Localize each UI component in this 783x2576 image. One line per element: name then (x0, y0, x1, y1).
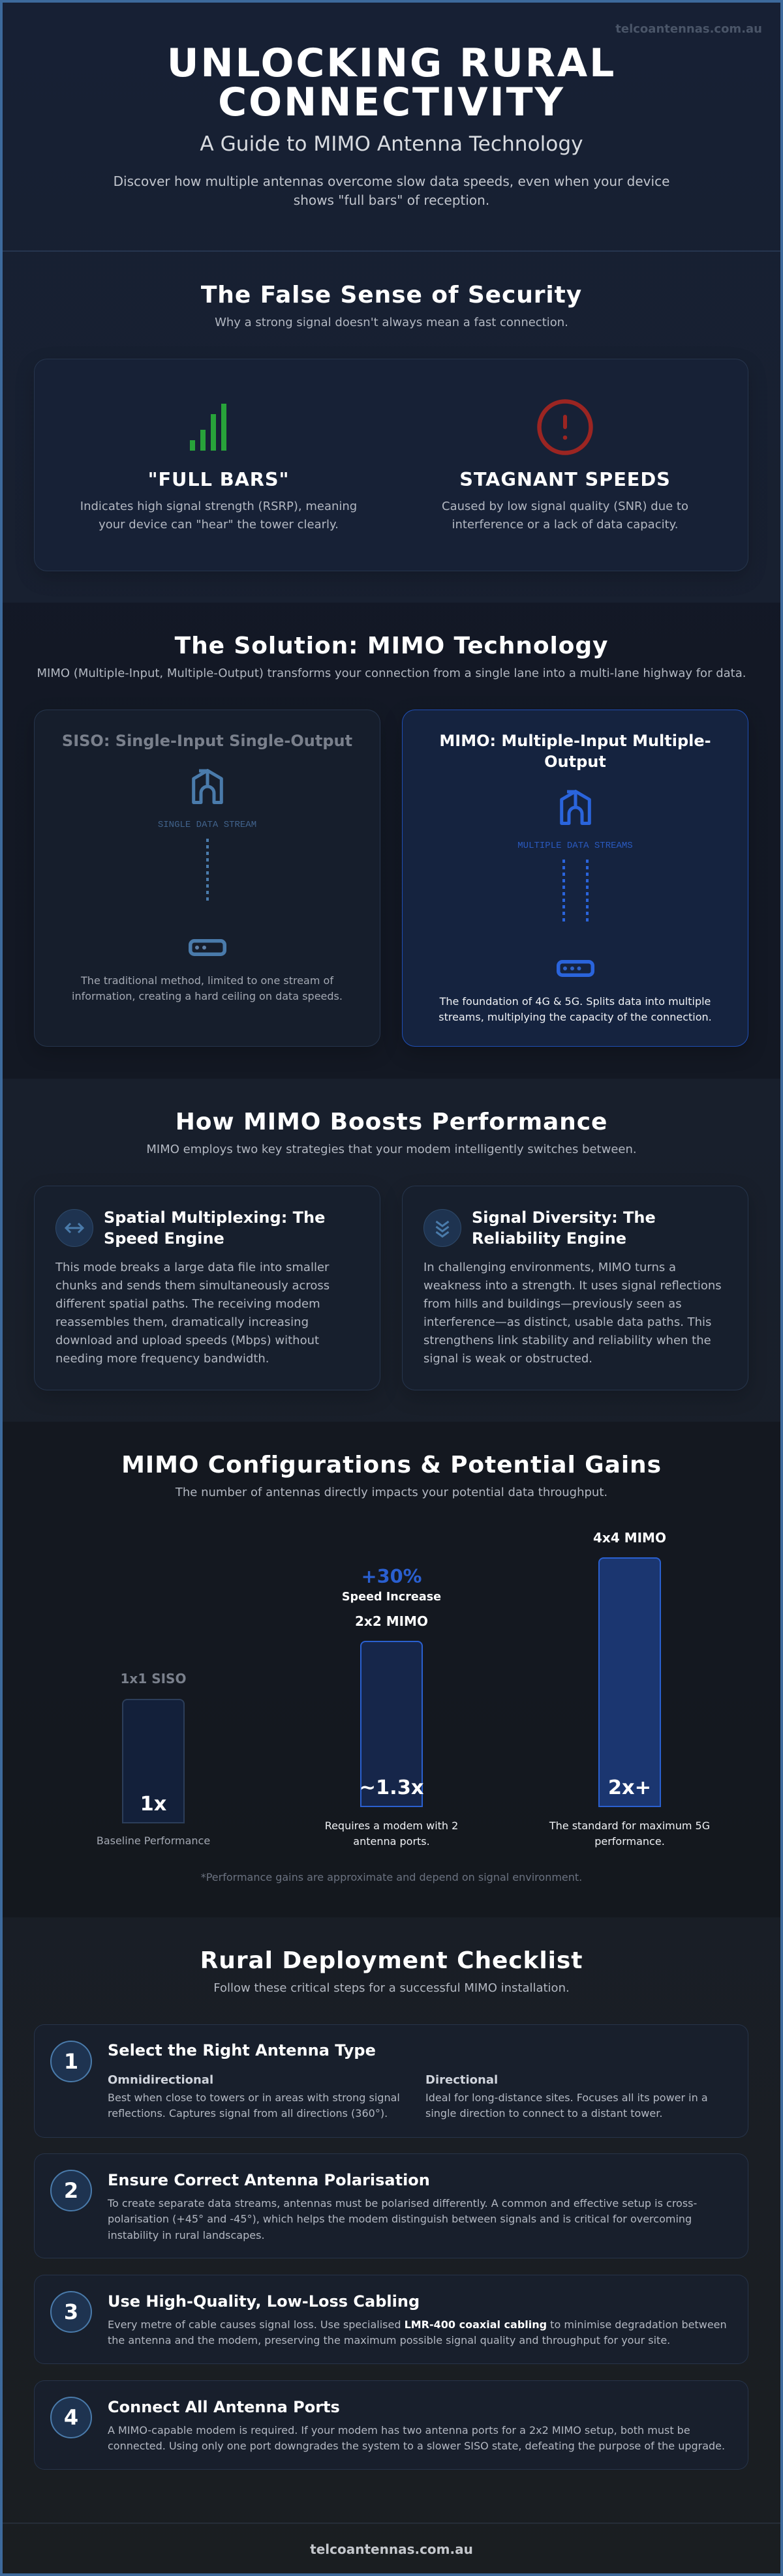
caption (325, 1820, 458, 1848)
value: 1x (140, 1792, 166, 1816)
card text (423, 1261, 722, 1366)
step text: To create separate data streams, antennas must be polarised differently. A common and effective setup is cross- (108, 2197, 697, 2209)
panel: SISO (34, 710, 380, 1047)
card text: needing more frequency bandwidth. (55, 1352, 269, 1366)
column: 2x2 MIMO (325, 1565, 458, 1848)
step text: polarisation (+45° and -45°), which helps the modem distinguish between signals and is critical for overcoming (108, 2213, 692, 2225)
section: false sense of security (34, 282, 748, 571)
title: CONNECTIVITY (218, 80, 565, 125)
icon: antenna (192, 769, 223, 804)
section subtitle: MIMO (Multiple-Input, Multiple-Output) transforms your connection from a single lane into a multi-lane highway for data. (37, 666, 746, 680)
step number: 1 (64, 2049, 78, 2074)
step text: the antenna and the modem, preserving the maximum possible signal quality and throughput for your site. (108, 2334, 670, 2346)
callout label: Speed Increase (342, 1591, 441, 1604)
intro text: shows "full bars" of reception. (294, 192, 489, 208)
directional text: Ideal for long-distance sites. Focuses all its power in a (425, 2091, 708, 2104)
section: configurations and gains (0, 1422, 783, 1917)
step text (108, 2318, 727, 2346)
card text: In challenging environments, MIMO turns a (423, 1261, 676, 1274)
omnidirectional text (108, 2091, 400, 2119)
intro text: Discover how multiple antennas overcome slow data speeds, even when your device (114, 173, 669, 189)
caption: The standard for maximum 5G (549, 1820, 710, 1831)
MIMO title (439, 732, 711, 771)
panel: signal diversity (402, 1186, 748, 1390)
card text: interference—as distinct, usable data paths. This (423, 1315, 711, 1329)
title: UNLOCKING RURAL (167, 40, 616, 86)
footer (0, 2523, 783, 2576)
SISO text (72, 974, 343, 1002)
card text: from hills and buildings—previously seen as (423, 1297, 682, 1311)
section subtitle: MIMO employs two key strategies that your modem intelligently switches between. (146, 1143, 637, 1156)
data stream 2 (586, 860, 589, 921)
directional text (425, 2091, 708, 2119)
card text: weakness into a strength. It uses signal reflections (423, 1279, 722, 1293)
step number: 4 (64, 2405, 78, 2430)
card heading (104, 1208, 325, 1248)
SISO text: information, creating a hard ceiling on data speeds. (72, 990, 343, 1002)
stagnant speeds text: Caused by low signal quality (SNR) due to (442, 500, 688, 513)
step text: instability in rural landscapes. (108, 2229, 265, 2241)
step number (50, 2291, 92, 2333)
heading: Rural Deployment Checklist (200, 1947, 583, 1974)
label: 2x2 MIMO (355, 1613, 428, 1629)
step title: Ensure Correct Antenna Polarisation (108, 2171, 430, 2189)
label: 1x1 SISO (121, 1671, 186, 1686)
step title: Connect All Antenna Ports (108, 2398, 340, 2416)
MIMO title: MIMO: Multiple-Input Multiple- (439, 732, 711, 750)
card text (55, 1261, 330, 1366)
panel: step 2 (34, 2153, 748, 2258)
bar chart (97, 1530, 710, 1848)
step text (107, 2197, 697, 2241)
stream label: MULTIPLE DATA STREAMS (517, 841, 633, 851)
section: the solution (0, 603, 783, 1079)
caption: Baseline Performance (97, 1835, 210, 1847)
step number (50, 2170, 92, 2211)
bar (598, 1557, 661, 1807)
full bars text: your device can "hear" the tower clearly. (99, 518, 339, 531)
directional text: single direction to connect to a distant tower. (425, 2107, 662, 2119)
full bars text: Indicates high signal strength (RSRP), meaning (80, 500, 357, 513)
value: 2x+ (608, 1776, 651, 1799)
icon: modem (557, 960, 594, 977)
bar (360, 1641, 423, 1807)
heading: The False Sense of Security (201, 282, 582, 308)
card text: download and upload speeds (Mbps) without (55, 1334, 319, 1347)
omnidirectional text: reflections. Captures signal from all directions (360°). (108, 2107, 388, 2119)
icon: modem (189, 939, 226, 956)
panel: MIMO (402, 710, 748, 1047)
card text: strengthens link stability and reliability when the (423, 1334, 711, 1347)
icon: alert circle (537, 399, 593, 455)
MIMO text: The foundation of 4G & 5G. Splits data into multiple (440, 995, 711, 1008)
panel: step 4 (34, 2380, 748, 2470)
footnote: *Performance gains are approximate and depend on signal environment. (201, 1871, 582, 1883)
MIMO title: Output (544, 753, 606, 771)
caption (549, 1820, 710, 1848)
step number (50, 2041, 92, 2082)
stream label: SINGLE DATA STREAM (158, 820, 256, 830)
data stream (206, 839, 209, 901)
step number: 3 (64, 2299, 78, 2324)
title (167, 40, 616, 125)
MIMO text (438, 995, 712, 1023)
column: 4x4 MIMO (549, 1530, 710, 1848)
omnidirectional text: Best when close to towers or in areas with strong signal (108, 2091, 400, 2104)
icon: chevrons (423, 1209, 461, 1247)
column: 1x1 SISO (97, 1671, 210, 1847)
card heading: Spatial Multiplexing: The (104, 1208, 325, 1227)
panel: full bars vs stagnant speeds (34, 359, 748, 571)
card text: This mode breaks a large data file into smaller (55, 1261, 329, 1274)
panel: step 3 (34, 2275, 748, 2364)
icon: arrows (55, 1209, 93, 1247)
card text: reassembles them, dramatically increasing (55, 1315, 309, 1329)
full bars heading: "FULL BARS" (148, 468, 289, 490)
watermark: telcoantennas.com.au (615, 22, 762, 36)
SISO title: SISO: Single-Input Single-Output (62, 732, 352, 750)
step text: A MIMO-capable modem is required. If your modem has two antenna ports for a 2x2 MIMO setup, both must be (108, 2424, 690, 2436)
label: 4x4 MIMO (593, 1530, 666, 1546)
MIMO text: streams, multiplying the capacity of the connection. (438, 1011, 712, 1023)
card heading: Speed Engine (104, 1229, 224, 1248)
stagnant speeds heading: STAGNANT SPEEDS (459, 468, 671, 490)
icon: signal bars (190, 404, 226, 451)
step number: 2 (64, 2178, 78, 2203)
card heading (472, 1208, 656, 1248)
step text: Every metre of cable causes signal loss. Use specialised LMR-400 coaxial cabling to minimise degradation between (108, 2318, 727, 2331)
card text: chunks and sends them simultaneously across (55, 1279, 330, 1293)
stagnant speeds text: interference or a lack of data capacity. (452, 518, 678, 531)
section subtitle: The number of antennas directly impacts your potential data throughput. (176, 1486, 607, 1499)
heading: MIMO Configurations & Potential Gains (121, 1452, 662, 1478)
SISO text: The traditional method, limited to one stream of (81, 974, 333, 987)
heading: The Solution: MIMO Technology (175, 633, 608, 659)
panel: spatial multiplexing (34, 1186, 380, 1390)
caption: Requires a modem with 2 (325, 1820, 458, 1831)
section: deployment checklist (34, 1947, 748, 2470)
directional heading: Directional (425, 2073, 498, 2087)
footer brand: telcoantennas.com.au (310, 2541, 473, 2557)
value: ~1.3x (360, 1776, 423, 1799)
icon: antenna (560, 790, 591, 825)
step title: Use High-Quality, Low-Loss Cabling (108, 2292, 420, 2311)
card text: different spatial paths. The receiving modem (55, 1297, 320, 1311)
omnidirectional heading: Omnidirectional (108, 2073, 213, 2087)
card text: signal is weak or obstructed. (423, 1352, 592, 1366)
bar (122, 1698, 185, 1823)
caption: performance. (594, 1835, 665, 1848)
subtitle: A Guide to MIMO Antenna Technology (200, 132, 583, 156)
full bars text (80, 500, 357, 531)
header (0, 0, 783, 252)
stagnant speeds text (442, 500, 688, 531)
step number (50, 2397, 92, 2438)
intro text (114, 173, 669, 208)
section: how MIMO boosts performance (34, 1109, 748, 1390)
section subtitle: Why a strong signal doesn't always mean a fast connection. (215, 316, 568, 329)
step text (108, 2424, 725, 2452)
step text: connected. Using only one port downgrades the system to a slower SISO state, defeating the purpose of the upgrade. (108, 2440, 725, 2452)
data stream 1 (562, 860, 565, 921)
panel: step 1 (34, 2024, 748, 2138)
step title: Select the Right Antenna Type (108, 2041, 376, 2059)
caption: antenna ports. (353, 1835, 430, 1848)
heading: How MIMO Boosts Performance (176, 1109, 607, 1135)
callout: +30%: +30% (361, 1565, 422, 1587)
card heading: Reliability Engine (472, 1229, 626, 1248)
section subtitle: Follow these critical steps for a successful MIMO installation. (213, 1981, 570, 1995)
card heading: Signal Diversity: The (472, 1208, 656, 1227)
